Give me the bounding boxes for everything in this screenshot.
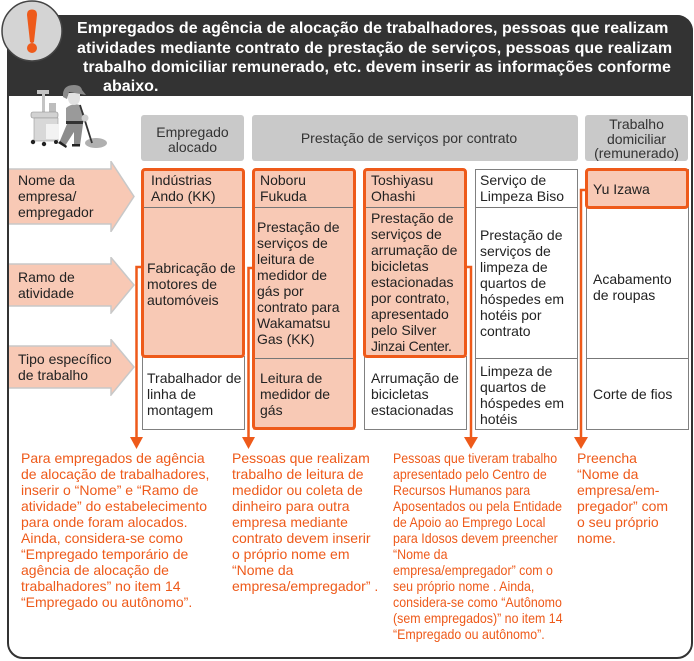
note: Silver Jinzai Center: seu próprio nome . Ainda,: [393, 578, 534, 594]
column 4 cells: hotéis: [480, 411, 517, 427]
column 3 cells: bicicletas: [371, 258, 429, 274]
row arrow: Ramo de atividade: atividade: [18, 285, 74, 301]
column 3 cells: Jinzai Center.: [371, 338, 452, 354]
note: leitura de medidor: empresa mediante: [232, 514, 348, 530]
note: trabalho domiciliar: “Nome da: [577, 466, 638, 482]
column 4 cells: [475, 169, 578, 430]
note: empregado alocado: trabalhadores” no item 14: [21, 578, 181, 594]
column 3 cells: arrumação de: [371, 242, 457, 258]
note: empregado alocado: Para empregados de agência: [21, 450, 205, 466]
column 2 cells: Wakamatsu: [257, 315, 330, 331]
note: trabalho domiciliar: Preencha: [577, 450, 637, 466]
column 2 cells: gás por: [257, 283, 304, 299]
note: leitura de medidor: medidor ou coleta de: [232, 482, 363, 498]
note: Silver Jinzai Center: Recursos Humanos para: [393, 482, 530, 498]
row arrow: Nome da empresa: Nome da: [18, 172, 75, 188]
column 3 cells: estacionadas: [371, 402, 454, 418]
note: empregado alocado: atividade” do estabelecimento: [21, 498, 207, 514]
note: trabalho domiciliar: [577, 450, 668, 546]
column 4 cells: limpeza de: [480, 259, 548, 275]
column 1 cells: linha de: [147, 386, 196, 402]
column 3 cells: serviços de: [371, 226, 442, 242]
column 5 cells: Yu Izawa: [593, 181, 650, 197]
note: leitura de medidor: trabalho de leitura de: [232, 466, 364, 482]
column 5 cells: de roupas: [593, 287, 655, 303]
note: Silver Jinzai Center: para Idosos devem preencher: [393, 530, 558, 546]
column 3 cells: Arrumação de: [371, 370, 459, 386]
column 2 cells: Prestação de: [257, 219, 340, 235]
note: Silver Jinzai Center: “Nome da: [393, 546, 447, 562]
column 1 cells: Fabricação de: [147, 260, 236, 276]
note: empregado alocado: agência de alocação de: [21, 562, 169, 578]
column 5 cells: [585, 168, 689, 430]
icon: cleaning worker with cart: [30, 85, 107, 148]
column 3 cells: Toshiyasu: [371, 172, 433, 188]
note: trabalho domiciliar: empresa/em-: [577, 482, 659, 498]
note: leitura de medidor: o próprio nome em: [232, 546, 350, 562]
column 3 cells: Ohashi: [371, 188, 415, 204]
note: empregado alocado: “Empregado ou autônomo”.: [21, 594, 192, 610]
note: Silver Jinzai Center: empresa/empregador” com o: [393, 562, 553, 578]
note: Silver Jinzai Center: Pessoas que tiveram trabalho: [393, 450, 557, 466]
column 2 cells: [252, 168, 356, 430]
column header: Empregado alocado: alocado: [168, 139, 217, 155]
column 3 cells: pelo Silver: [371, 322, 436, 338]
column header: Trabalho domiciliar: [585, 115, 688, 161]
note: Silver Jinzai Center: apresentado pelo Centro de: [393, 466, 547, 482]
row arrow: Tipo específico de trabalho: de trabalho: [18, 367, 88, 383]
note: Silver Jinzai Center: de Apoio ao Emprego Local: [393, 514, 545, 530]
column 2 cells: Leitura de: [260, 370, 322, 386]
column 1 cells: motores de: [147, 276, 217, 292]
row arrow: Nome da empresa: empresa/: [18, 188, 76, 204]
column header: Prestação de serviços por contrato: [252, 115, 578, 161]
column 4 cells: Limpeza de: [480, 363, 552, 379]
note: leitura de medidor: contrato devem inserir: [232, 530, 371, 546]
column 2 cells: medidor de: [260, 386, 330, 402]
note: empregado alocado: para onde foram alocados.: [21, 514, 188, 530]
column header: Empregado alocado: Empregado: [156, 124, 229, 140]
note: leitura de medidor: Pessoas que realizam: [232, 450, 370, 466]
note: Silver Jinzai Center: Aposentados ou pela Entidade: [393, 498, 562, 514]
header text: Empregados de agência de alocação de trabalhadores, pessoas que realizam: [77, 20, 668, 37]
column 3 cells: estacionadas: [371, 274, 454, 290]
column 2 cells: Fukuda: [260, 188, 307, 204]
note: Silver Jinzai Center: [393, 450, 563, 642]
column 4 cells: hóspedes em: [480, 291, 564, 307]
icon: exclamation mark: [1, 0, 62, 62]
column 1 cells: Trabalhador de: [147, 370, 241, 386]
note: empregado alocado: [21, 450, 209, 610]
column 1 cells: automóveis: [147, 292, 219, 308]
note: trabalho domiciliar: nome.: [577, 530, 616, 546]
column 1 cells: Indústrias: [151, 172, 212, 188]
note: empregado alocado: de alocação de trabalhadores,: [21, 466, 209, 482]
column 4 cells: quartos de: [480, 379, 546, 395]
column 2 cells: gás: [260, 402, 283, 418]
column 3 cells: [363, 168, 467, 430]
column 4 cells: Prestação de: [480, 227, 562, 243]
note: empregado alocado: inserir o “Nome” e “Ramo de: [21, 482, 198, 498]
column 4 cells: Limpeza Biso: [480, 188, 564, 204]
row arrow: Ramo de atividade: Ramo de: [18, 269, 75, 285]
header text: abaixo.: [103, 78, 158, 95]
note: trabalho domiciliar: o seu próprio: [577, 514, 659, 530]
column header: Trabalho domiciliar: (remunerado): [594, 145, 679, 161]
row arrow: Tipo específico de trabalho: [9, 339, 135, 396]
row arrow: Ramo de atividade: [9, 257, 135, 314]
column 2 cells: medidor de: [257, 267, 327, 283]
note: Silver Jinzai Center: “Empregado ou autônomo”.: [393, 626, 545, 642]
header text: trabalho domiciliar remunerado, etc. devem inserir as informações conforme: [83, 59, 671, 76]
column 2 cells: Gas (KK): [257, 331, 315, 347]
column 4 cells: Serviço de: [480, 172, 546, 188]
column 2 cells: Noboru: [260, 172, 306, 188]
column 4 cells: hóspedes em: [480, 395, 564, 411]
note: leitura de medidor: empresa/empregador” .: [232, 578, 378, 594]
column 3 cells: bicicletas: [371, 386, 429, 402]
note: Silver Jinzai Center: considera-se como “Autônomo: [393, 594, 562, 610]
column header: Empregado alocado: [141, 115, 244, 161]
note: empregado alocado: Ainda, considera-se como: [21, 530, 183, 546]
column header: Trabalho domiciliar: domiciliar: [607, 130, 666, 146]
column 1 cells: [141, 168, 245, 430]
header text: atividades mediante contrato de prestação de serviços, pessoas que realizam: [77, 40, 672, 57]
column 4 cells: contrato: [480, 323, 531, 339]
note: empregado alocado: “Empregado temporário de: [21, 546, 188, 562]
column header: Trabalho domiciliar: Trabalho: [609, 116, 664, 132]
column 1 cells: Ando (KK): [151, 188, 216, 204]
column 4 cells: hotéis por: [480, 307, 541, 323]
column 1 cells: montagem: [147, 402, 213, 418]
row arrow: Tipo específico de trabalho: Tipo específico: [18, 351, 112, 367]
column 5 cells: Acabamento: [593, 271, 672, 287]
note: Silver Jinzai Center: (sem empregados)” no item 14: [393, 610, 563, 626]
note: leitura de medidor: [232, 450, 378, 594]
column 4 cells: serviços de: [480, 243, 551, 259]
column 4 cells: quartos de: [480, 275, 546, 291]
column header: Prestação de serviços por contrato: Prestação de serviços por contrato: [301, 130, 517, 146]
column 5 cells: Corte de fios: [593, 386, 672, 402]
column 2 cells: contrato para: [257, 299, 340, 315]
note: leitura de medidor: “Nome da: [232, 562, 293, 578]
column 2 cells: serviços de: [257, 235, 328, 251]
column 3 cells: apresentado: [371, 306, 449, 322]
row arrow: Nome da empresa: empregador: [18, 204, 94, 220]
header band: [7, 15, 693, 96]
column 3 cells: Prestação de: [371, 210, 454, 226]
note: leitura de medidor: dinheiro para outra: [232, 498, 350, 514]
note: trabalho domiciliar: pregador” com: [577, 498, 668, 514]
header text: [77, 20, 672, 95]
row arrow: Nome da empresa: [9, 161, 135, 232]
column 3 cells: por contrato,: [371, 290, 450, 306]
column 2 cells: leitura de: [257, 251, 315, 267]
